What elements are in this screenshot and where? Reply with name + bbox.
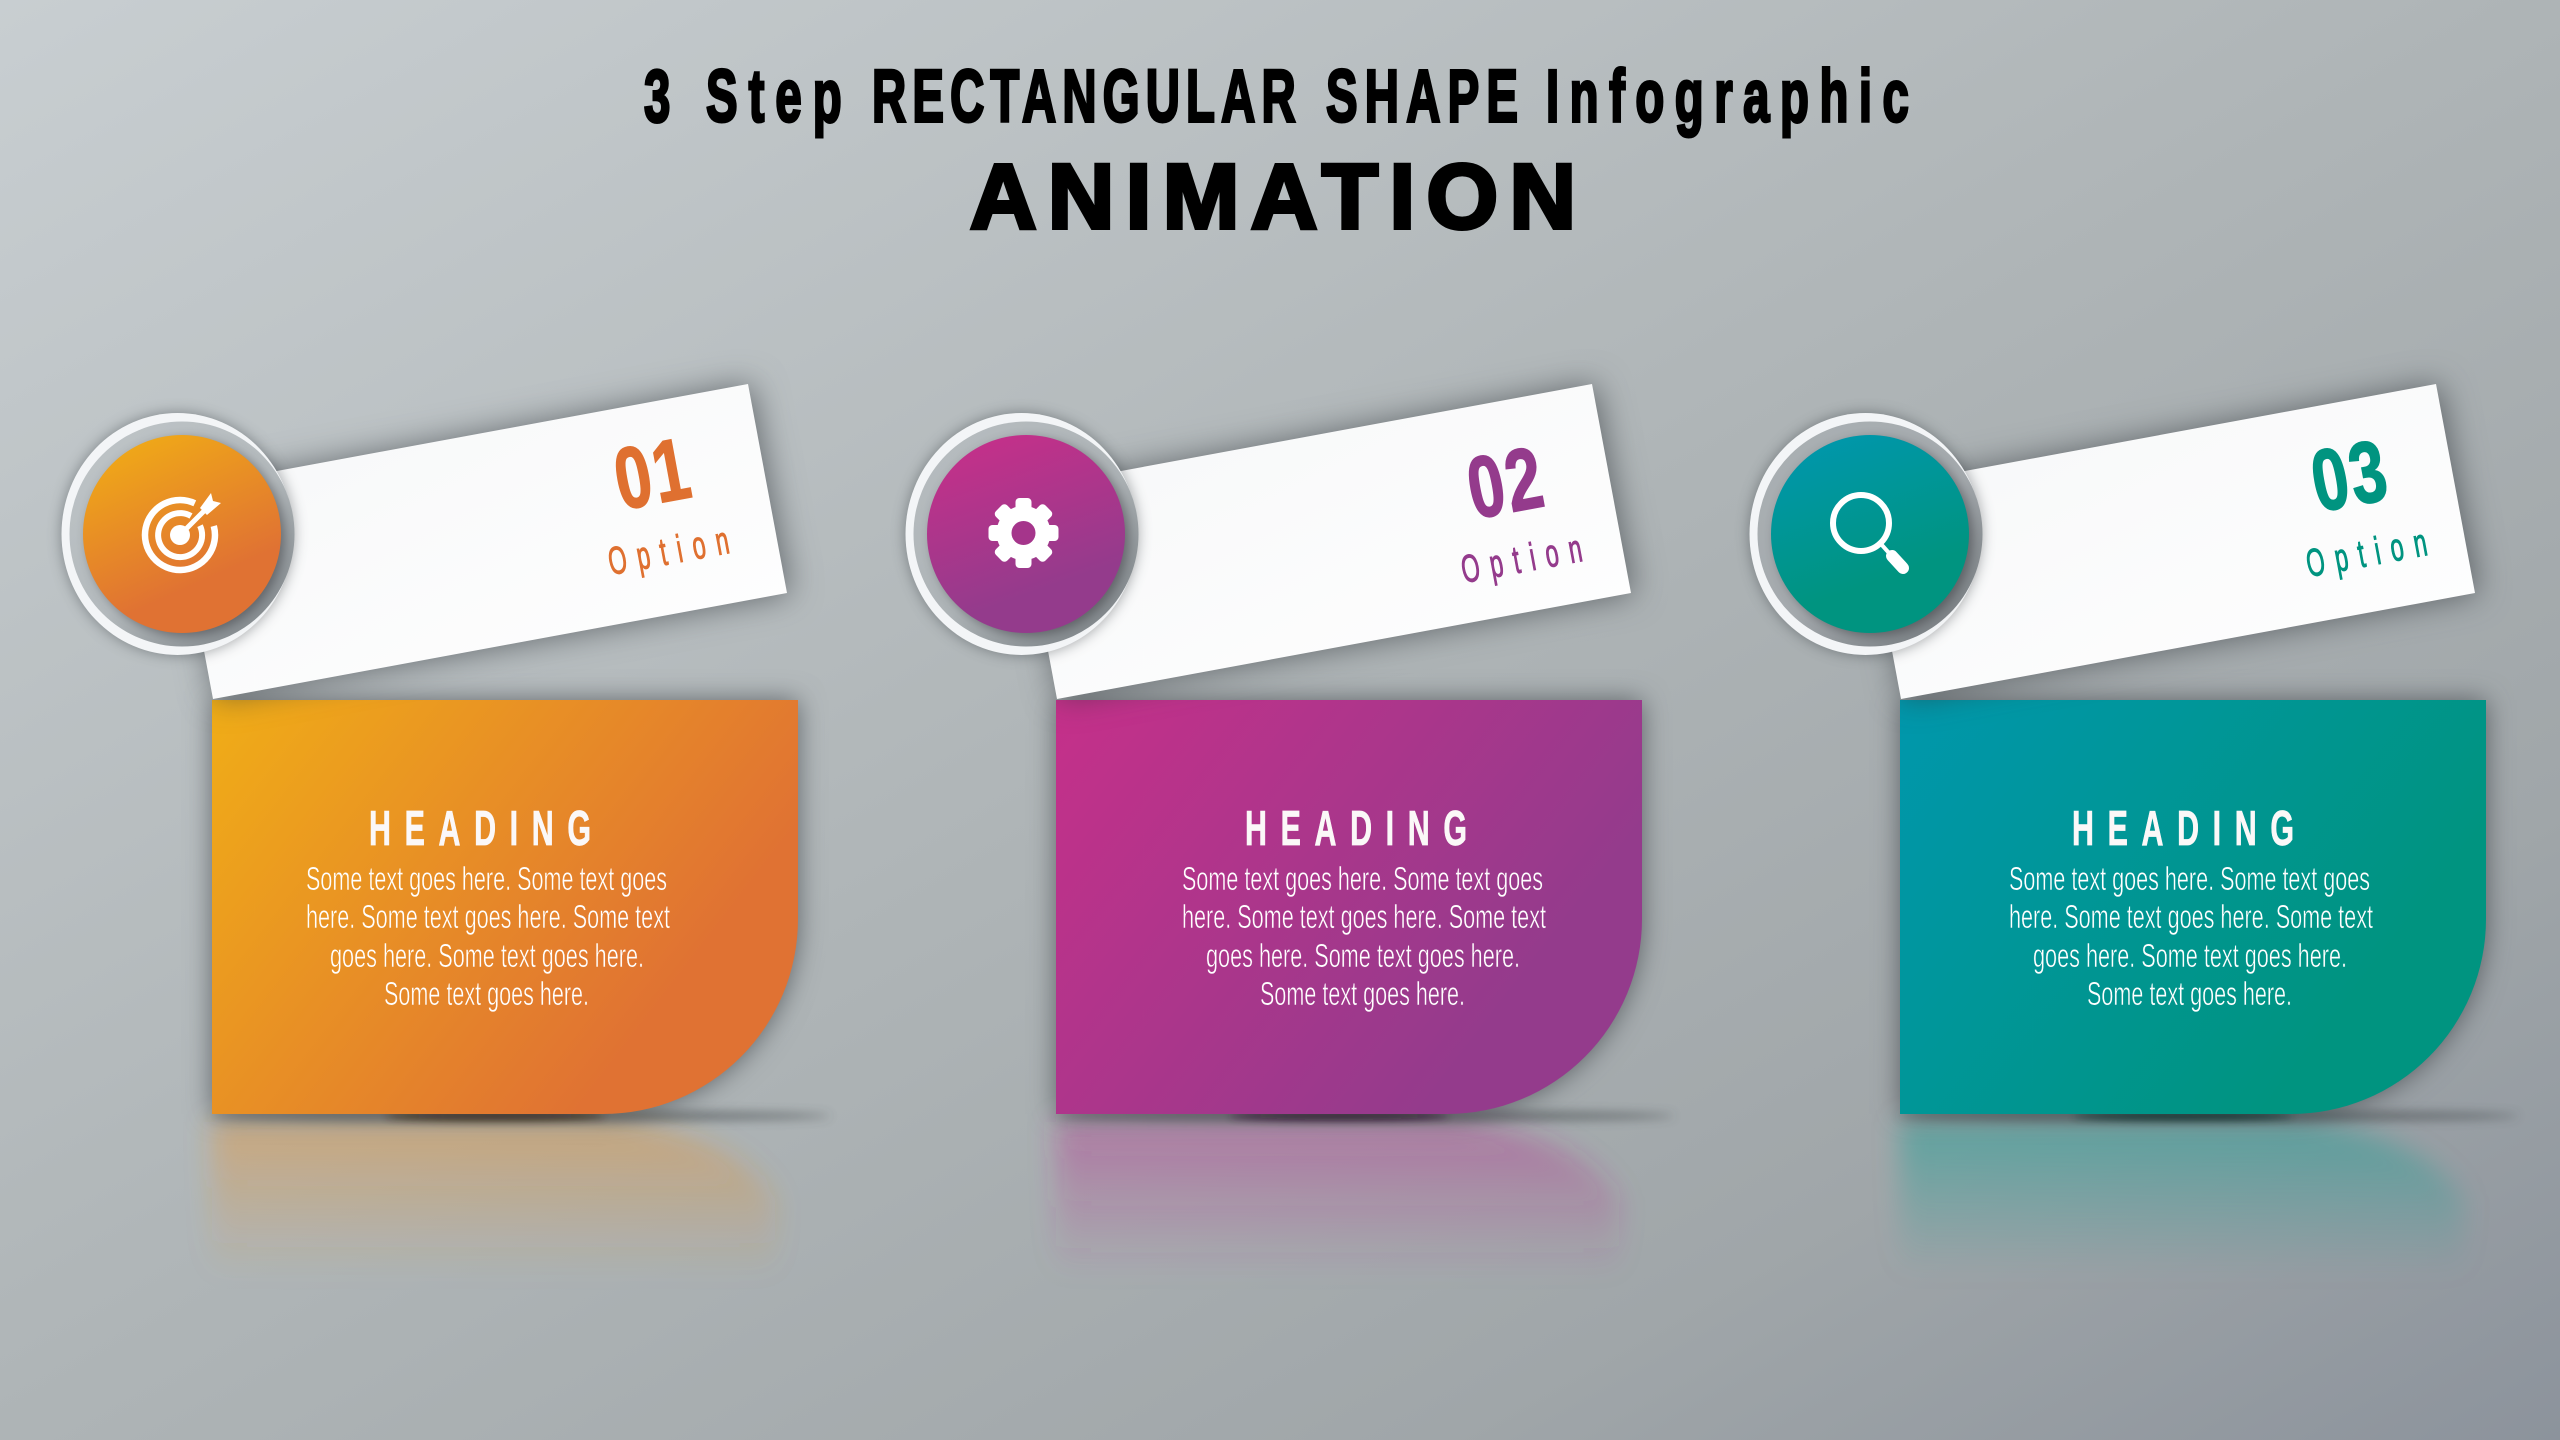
step 3 — [1750, 384, 2518, 1275]
card 1 body text: here. Some text goes here. Some text — [306, 898, 670, 935]
title line 1: SHAPE — [1326, 56, 1518, 138]
white tag 2 — [1018, 384, 1631, 699]
card 3 body text — [2009, 860, 2373, 1012]
title line 1 — [644, 56, 1909, 138]
card 3 body text: Some text goes here. Some text goes — [2009, 860, 2370, 897]
circle badge 3 — [1750, 413, 1982, 655]
circle badge 2 — [906, 413, 1138, 655]
card 2 body text: here. Some text goes here. Some text — [1182, 898, 1546, 935]
card 1 body text: goes here. Some text goes here. — [330, 937, 644, 974]
card 1 body text — [306, 860, 670, 1012]
circle badge 1 — [62, 413, 294, 655]
icon: magnifying glass — [1833, 495, 1903, 568]
option label 2: Option — [1458, 526, 1585, 591]
card 3 heading: HEADING — [2072, 801, 2294, 856]
card 2 body text: goes here. Some text goes here. — [1206, 937, 1520, 974]
title line 1: Step — [706, 56, 842, 138]
card 2 body text — [1182, 860, 1546, 1012]
card 1 body text: Some text goes here. — [384, 975, 589, 1012]
number 01: 01 — [607, 421, 697, 529]
number 03: 03 — [2304, 423, 2394, 531]
icon: target with arrow — [145, 493, 221, 570]
title line 1: RECTANGULAR — [872, 56, 1296, 138]
floor shadow 2 — [1054, 1110, 1674, 1122]
option label 3: Option — [2303, 520, 2430, 585]
icon: gear — [988, 498, 1058, 568]
white tag 1 — [174, 384, 787, 699]
option label 1: Option — [605, 518, 732, 583]
card 3 — [1900, 700, 2486, 1114]
number 02: 02 — [1460, 430, 1550, 538]
title line 2: ANIMATION — [970, 146, 1576, 248]
card 3 body text: here. Some text goes here. Some text — [2009, 898, 2373, 935]
card 1 — [212, 700, 798, 1114]
card 2 heading: HEADING — [1245, 801, 1467, 856]
floor shadow 3 — [1898, 1110, 2518, 1122]
title line 1: Infographic — [1546, 56, 1909, 138]
reflection 1 — [212, 1122, 775, 1275]
floor shadow 1 — [210, 1110, 830, 1122]
title — [644, 56, 1909, 248]
reflection 3 — [1900, 1122, 2463, 1275]
card 2 — [1056, 700, 1642, 1114]
step 1 — [62, 384, 830, 1275]
step 2 — [906, 384, 1674, 1275]
card 3 body text: goes here. Some text goes here. — [2033, 937, 2347, 974]
white tag 3 — [1862, 384, 2475, 699]
card 3 body text: Some text goes here. — [2087, 975, 2292, 1012]
reflection 2 — [1056, 1122, 1619, 1275]
card 2 body text: Some text goes here. Some text goes — [1182, 860, 1543, 897]
card 2 body text: Some text goes here. — [1260, 975, 1465, 1012]
card 1 heading: HEADING — [369, 801, 591, 856]
card 1 body text: Some text goes here. Some text goes — [306, 860, 667, 897]
title line 1: 3 — [644, 56, 670, 138]
